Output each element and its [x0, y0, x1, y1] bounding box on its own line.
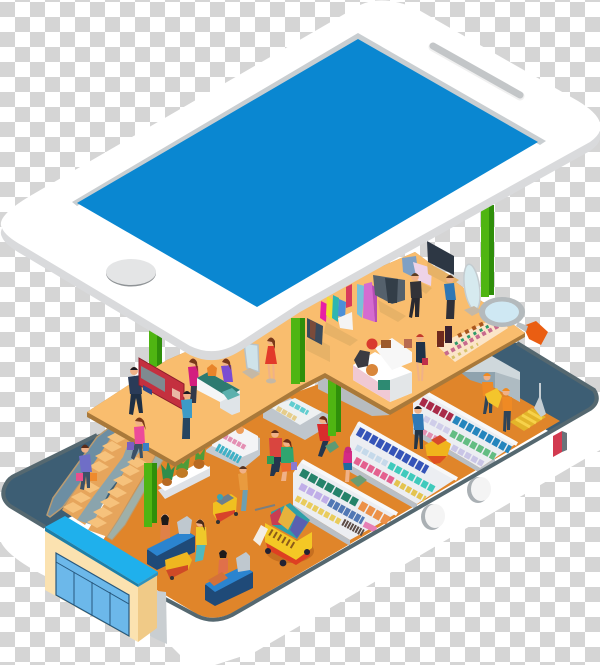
stock lockers [460, 355, 520, 402]
shopper: couple woman [280, 439, 297, 481]
windows [56, 553, 129, 636]
man in blue [444, 275, 456, 319]
basket cart: orange [425, 435, 451, 464]
icon: side button 1 [421, 504, 445, 530]
screen [77, 39, 538, 307]
clothing rack 2 colourful [320, 284, 358, 346]
shop entrance building [45, 516, 167, 644]
right steps [87, 457, 147, 528]
escalator middle strip [77, 430, 145, 525]
column back right [481, 205, 494, 297]
service counter [197, 372, 240, 415]
icon: side button red [553, 431, 567, 457]
dark coats rack [427, 241, 459, 286]
escalator left step bed [62, 430, 135, 525]
man pointing at card [181, 391, 192, 439]
column back left [149, 330, 162, 370]
salesman [409, 273, 422, 318]
woman in red dress [265, 337, 277, 384]
mezzanine floor [87, 252, 525, 467]
credit card sign [139, 358, 184, 410]
escalator right step bed [88, 445, 158, 537]
column lower left [144, 463, 157, 527]
shelf A [413, 393, 517, 473]
back wall left [4, 400, 180, 528]
roof [45, 516, 158, 587]
rim of lower phone [3, 343, 597, 620]
woman with handbag [416, 334, 428, 381]
escalators [47, 415, 168, 540]
shopper: couple man [267, 430, 282, 476]
tall mirror [461, 263, 483, 316]
shopper: woman in yellow [195, 519, 207, 562]
small cart at till [165, 552, 192, 580]
pallet [510, 408, 546, 431]
shopper: woman in pink top [343, 447, 352, 482]
woman at counter [188, 358, 199, 403]
big shopping cart [253, 503, 314, 566]
ground floor [100, 364, 560, 618]
cash desk left [147, 514, 195, 570]
clothing rack 3 dark [373, 275, 406, 322]
dress rack [357, 282, 377, 322]
phone top surface [1, 0, 600, 351]
escalator left glass panel [47, 415, 122, 517]
shopper: woman with small cart [238, 466, 248, 511]
mirror [242, 343, 260, 379]
upper phone [1, 0, 600, 360]
phone side edge [1, 9, 600, 360]
building grey wall [150, 590, 167, 644]
escalator right rail [107, 443, 168, 540]
shelf C [293, 460, 397, 546]
shoe display [436, 316, 508, 362]
worker 1 with box [482, 373, 494, 414]
lower phone body [0, 385, 600, 665]
worker 2 [502, 388, 512, 432]
basket [350, 475, 367, 487]
man in suit [128, 367, 143, 415]
screen bevel [72, 33, 546, 206]
left steps [63, 432, 127, 513]
column mid [291, 318, 305, 384]
icon: side button 2 [467, 477, 491, 503]
shelf E [263, 398, 330, 440]
clothing rack 1 [306, 318, 330, 362]
handbag display [353, 338, 412, 402]
building front wall [45, 530, 138, 642]
woman on right escalator [127, 418, 149, 460]
icon: magnifying glass [479, 297, 548, 345]
hand truck [534, 383, 546, 417]
speaker [433, 46, 520, 96]
back wall right [440, 340, 596, 432]
shopper: man with blue shirt [412, 406, 424, 449]
building side wall [138, 573, 157, 642]
clothing rack 4 [402, 256, 432, 294]
column lower centre [328, 380, 341, 436]
woman on left escalator [76, 444, 97, 490]
shelf D [206, 426, 260, 469]
cash desk right [205, 550, 253, 606]
icon: plant 3 [194, 448, 205, 469]
home button [106, 259, 156, 286]
shopper: woman in red [317, 416, 339, 457]
cashier [221, 358, 233, 382]
plant display [158, 448, 210, 499]
small shopping cart [213, 494, 238, 524]
mezzanine underside grey [318, 378, 390, 416]
icon: plant 2 [176, 456, 190, 478]
icon: plant 1 [161, 460, 175, 486]
yellow box [485, 388, 502, 408]
shelf B [350, 422, 457, 510]
icon: gift on counter [207, 364, 217, 376]
